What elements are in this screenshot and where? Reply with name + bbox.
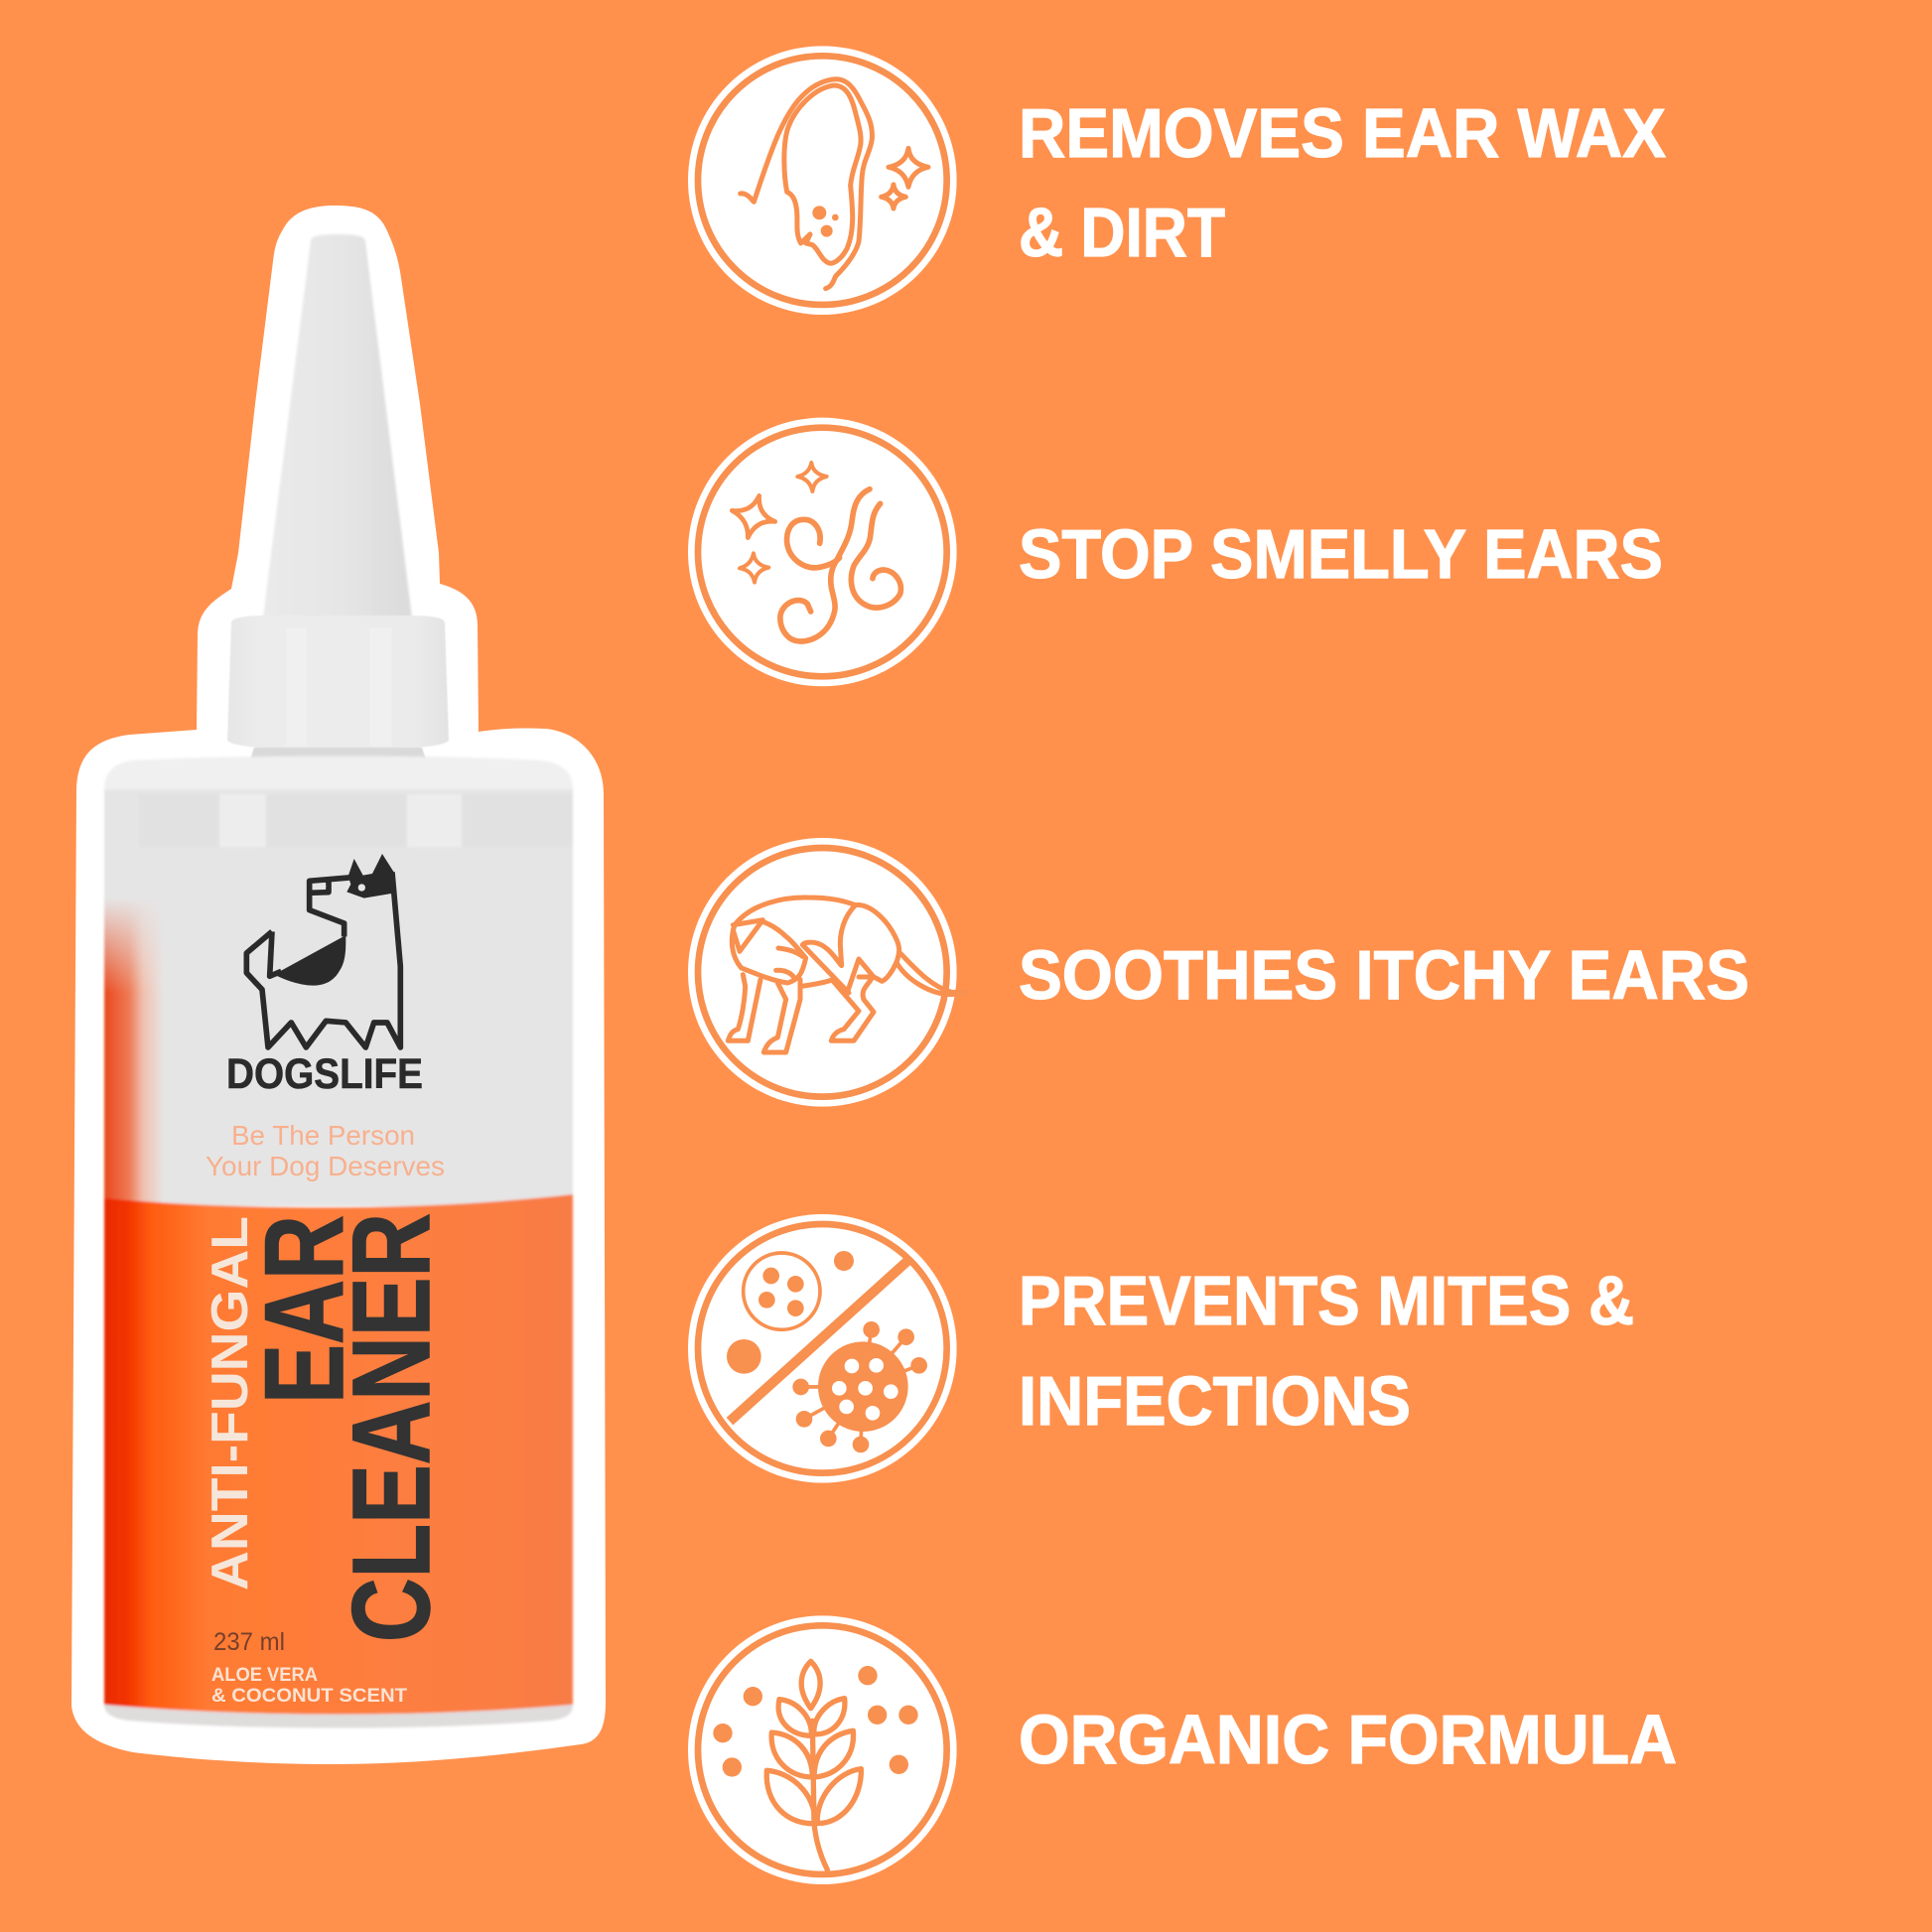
text: and dirt: & DIRT [1019,194,1225,271]
dog outline [246,872,400,1047]
white label area [104,757,573,1206]
volume: 237 ml [213,1628,285,1656]
feature: organic formula [688,1615,1677,1884]
feature: removes ear wax [688,46,1666,315]
text: soothes itchy ears: SOOTHES ITCHY EARS [1019,936,1749,1014]
text: infections: INFECTIONS [1019,1362,1411,1440]
orange label area [104,1194,573,1715]
bottle body [104,757,573,1727]
icon: odour swirls with sparkles [688,418,957,686]
anti-fungal label: ANTI-FUNGAL [202,1216,259,1590]
text: prevents mites and: PREVENTS MITES & [1019,1262,1634,1339]
dog eye and nose [322,884,365,892]
icon: ear with sparkles [688,46,957,315]
scent line one: ALOE VERA [211,1665,318,1686]
text: removes ear wax: REMOVES EAR WAX [1019,94,1666,172]
icon: crossed out germs [688,1214,957,1483]
tagline line two: Your Dog Deserves [206,1151,445,1181]
bottle base [104,1705,573,1727]
bottle neck [249,748,427,766]
dog chest patch [274,935,345,986]
text: stop smelly ears: STOP SMELLY EARS [1019,515,1663,593]
feature: stop smelly ears [688,418,1663,686]
dog head patch [346,854,395,898]
icon: dog scratching [688,838,966,1107]
brand name: DOGSLIFE [226,1050,423,1098]
feature: prevents mites and infections [688,1214,1634,1483]
icon: wheat with seeds [688,1615,957,1884]
dogslife logo [246,854,400,1047]
text: organic formula: ORGANIC FORMULA [1019,1701,1677,1778]
cleaner label: CLEANER [331,1213,453,1642]
product bottle [71,206,606,1764]
ear label: EAR [242,1215,366,1404]
feature: soothes itchy ears [688,838,1749,1107]
tagline line one: Be The Person [231,1120,415,1151]
bottle cap [227,616,449,766]
bottle nozzle [262,234,413,625]
white sticker outline [71,206,606,1764]
scent line two: & COCONUT SCENT [211,1686,407,1707]
